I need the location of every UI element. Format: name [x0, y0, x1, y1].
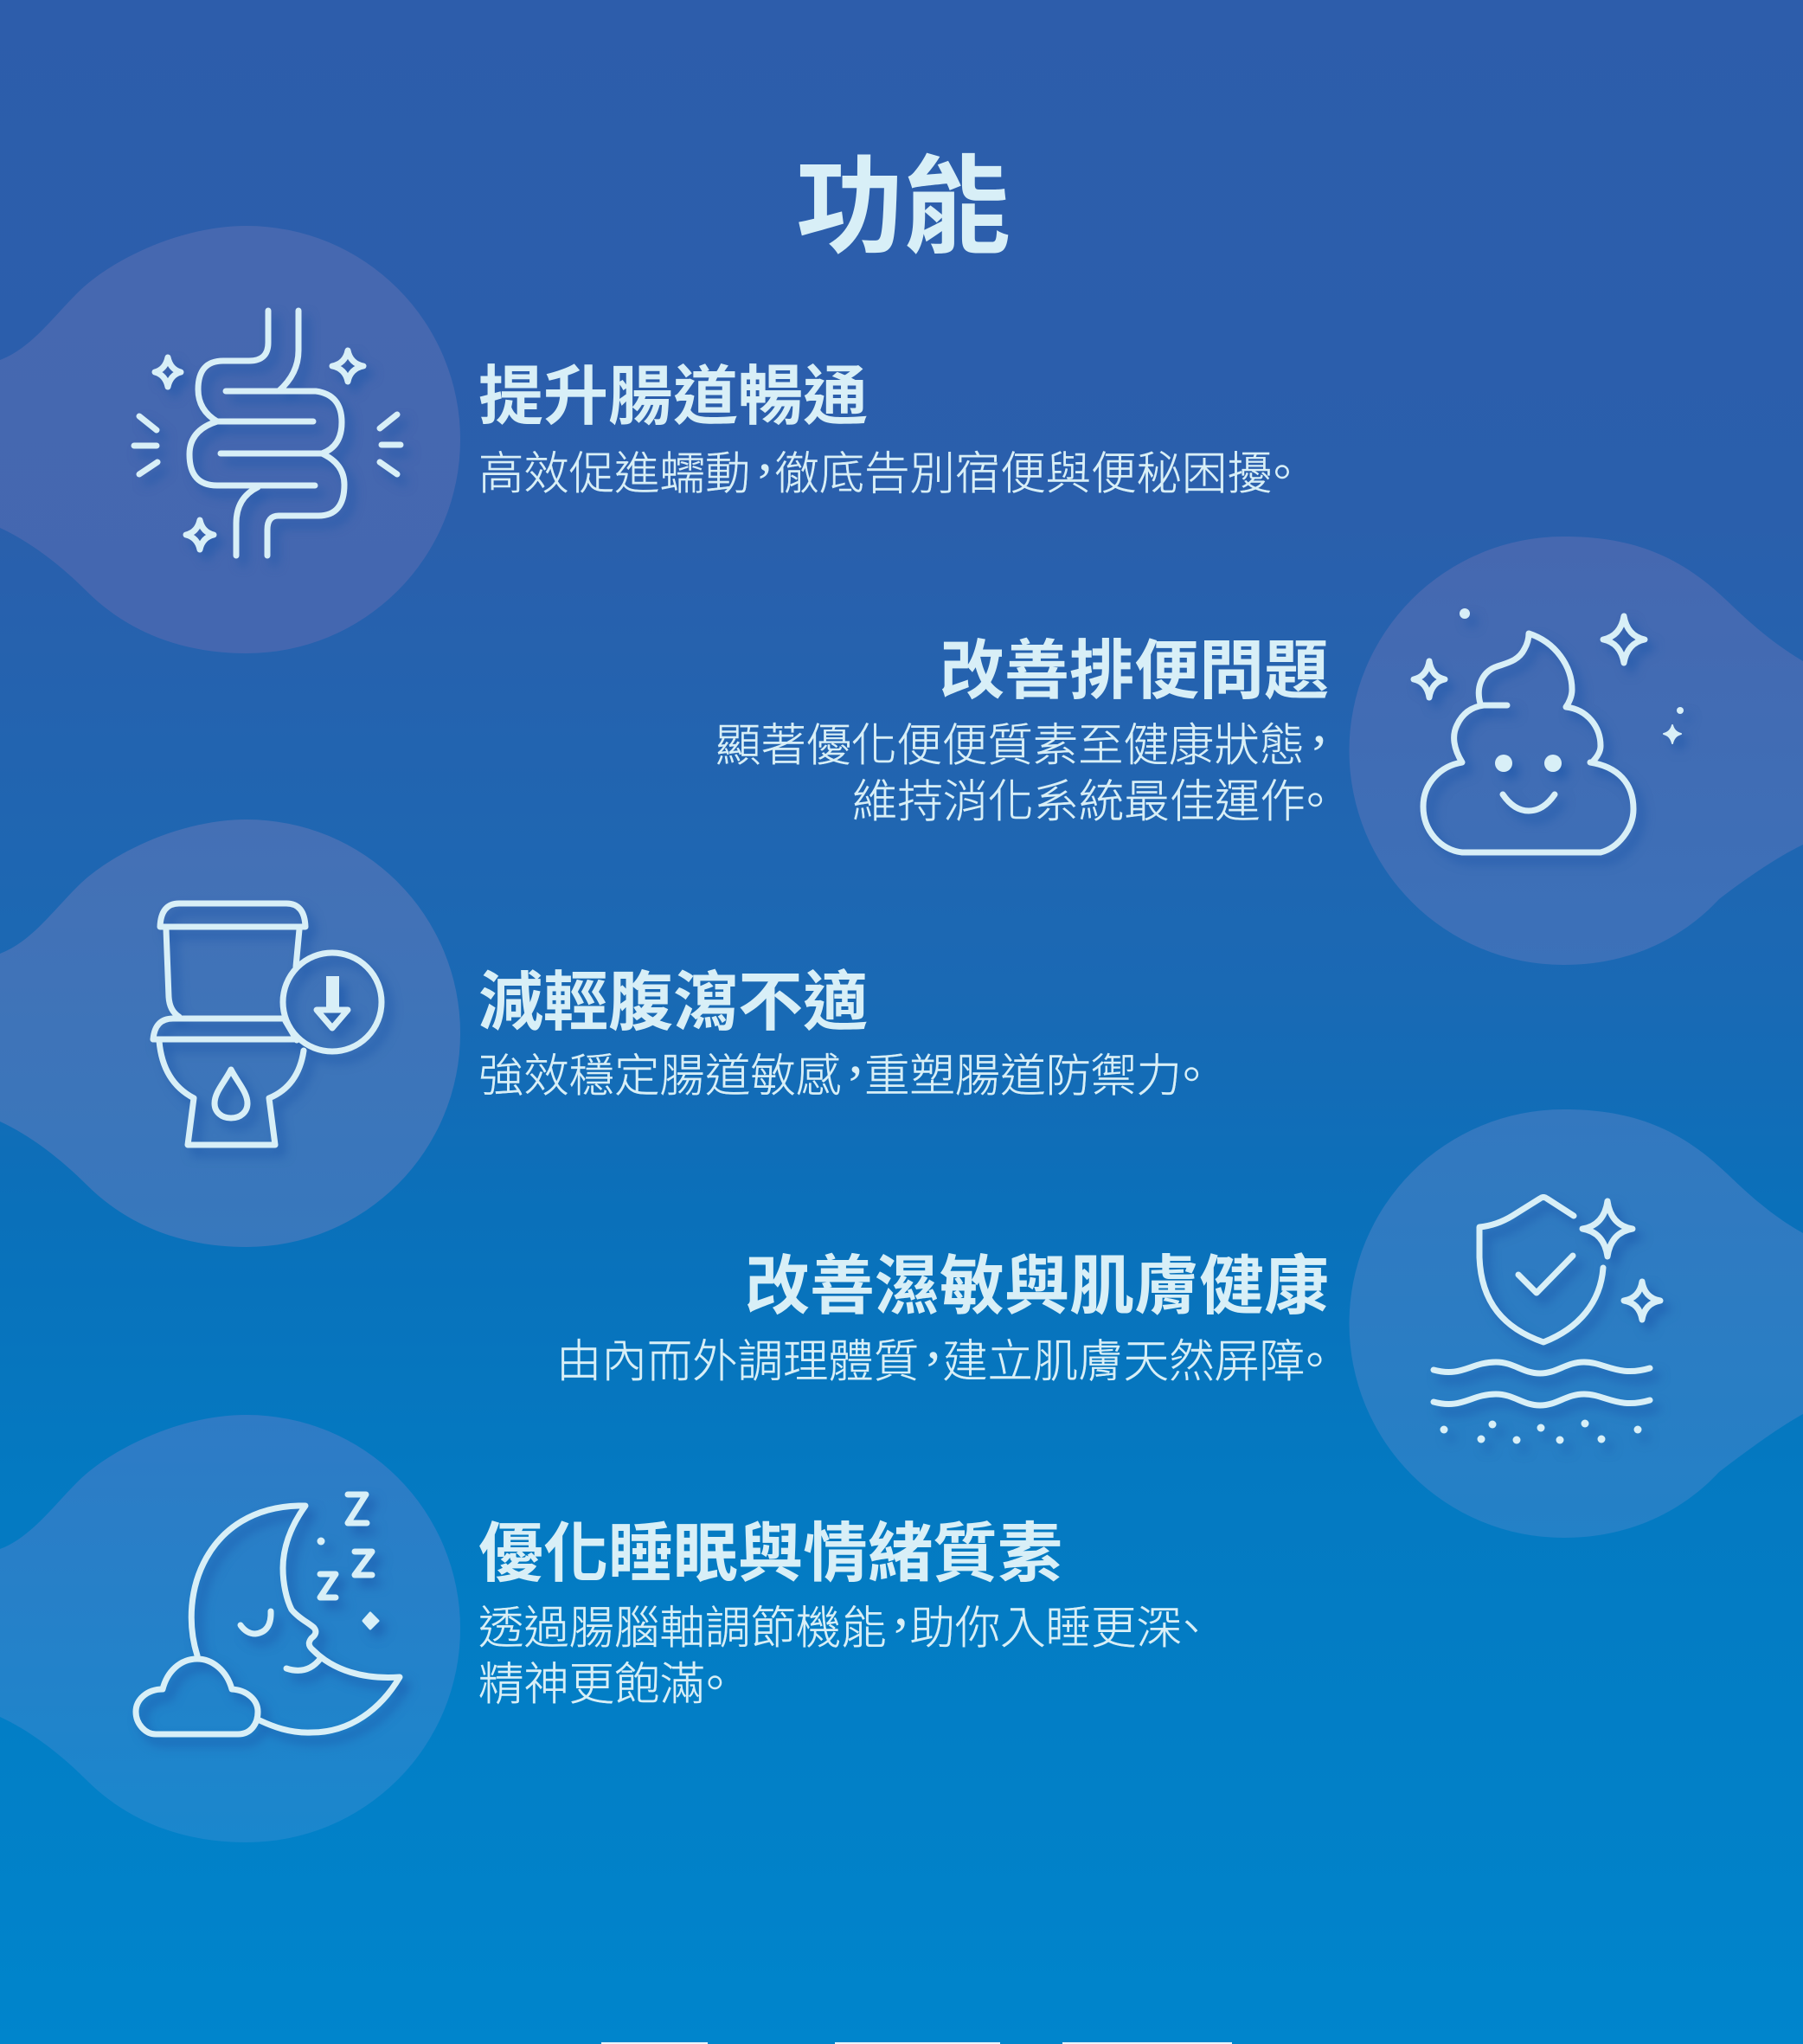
heading: 減輕腹瀉不適 [478, 966, 868, 1038]
blob background [0, 820, 460, 1247]
icon: shield, waves and skin [1431, 1194, 1669, 1443]
panel: relieve diarrhea: , [849, 1023, 863, 1084]
blob background [0, 226, 460, 653]
description [478, 1606, 1204, 1707]
cropped elements at bottom edge [600, 2042, 1232, 2044]
panel: improve defecation problems [715, 537, 1803, 965]
icon: smiling poop [1410, 608, 1687, 865]
panel: improve eczema and skin health: , [927, 1308, 940, 1370]
blob background [1350, 537, 1803, 965]
panel: relieve diarrhea [0, 820, 1214, 1247]
panel: improve bowel movement: , [758, 421, 772, 482]
title: 功能 [796, 148, 1011, 267]
blob background [1350, 1109, 1803, 1538]
description [715, 692, 1338, 827]
description: 由內而外調理體質 建立肌膚天然屏障 [556, 1337, 1305, 1387]
heading: 改善排便問題 [940, 634, 1329, 707]
description: 高效促進蠕動 徹底告別宿便與便秘困擾 [478, 449, 1273, 499]
description: 。 [1292, 1337, 1338, 1387]
panel: optimize sleep and mood [0, 1415, 1214, 1842]
description: 。 [1260, 449, 1305, 499]
blob background [0, 1415, 460, 1842]
description [478, 421, 1305, 499]
heading: 優化睡眠與情緒質素 [478, 1517, 1062, 1590]
description: 顯著優化便便質素至健康狀態 [715, 721, 1305, 771]
panel: improve defecation problems: , [1312, 692, 1326, 754]
description: 。 [692, 1660, 737, 1710]
description: 強效穩定腸道敏感 重塑腸道防禦力 [478, 1051, 1182, 1102]
description: 。 [1293, 777, 1338, 827]
description [478, 1023, 1214, 1102]
panel: improve eczema and skin health [556, 1109, 1803, 1538]
description [556, 1308, 1338, 1387]
panel: optimize sleep and mood: , [895, 1575, 908, 1636]
icon: toilet with down arrow [151, 900, 393, 1157]
description: 透過腸腦軸調節機能 助你入睡更深 [478, 1604, 1182, 1654]
description: 。 [1169, 1051, 1214, 1102]
icon: intestine [132, 308, 408, 564]
heading: 改善濕敏與肌膚健康 [745, 1250, 1329, 1322]
icon: sleeping moon and cloud [133, 1492, 410, 1748]
description: 精神更飽滿 [478, 1660, 705, 1710]
panel: improve bowel movement [0, 226, 1305, 653]
description: 維持消化系統最佳運作 [852, 777, 1306, 827]
heading: 提升腸道暢通 [478, 360, 868, 433]
description: 、 [1169, 1604, 1214, 1654]
